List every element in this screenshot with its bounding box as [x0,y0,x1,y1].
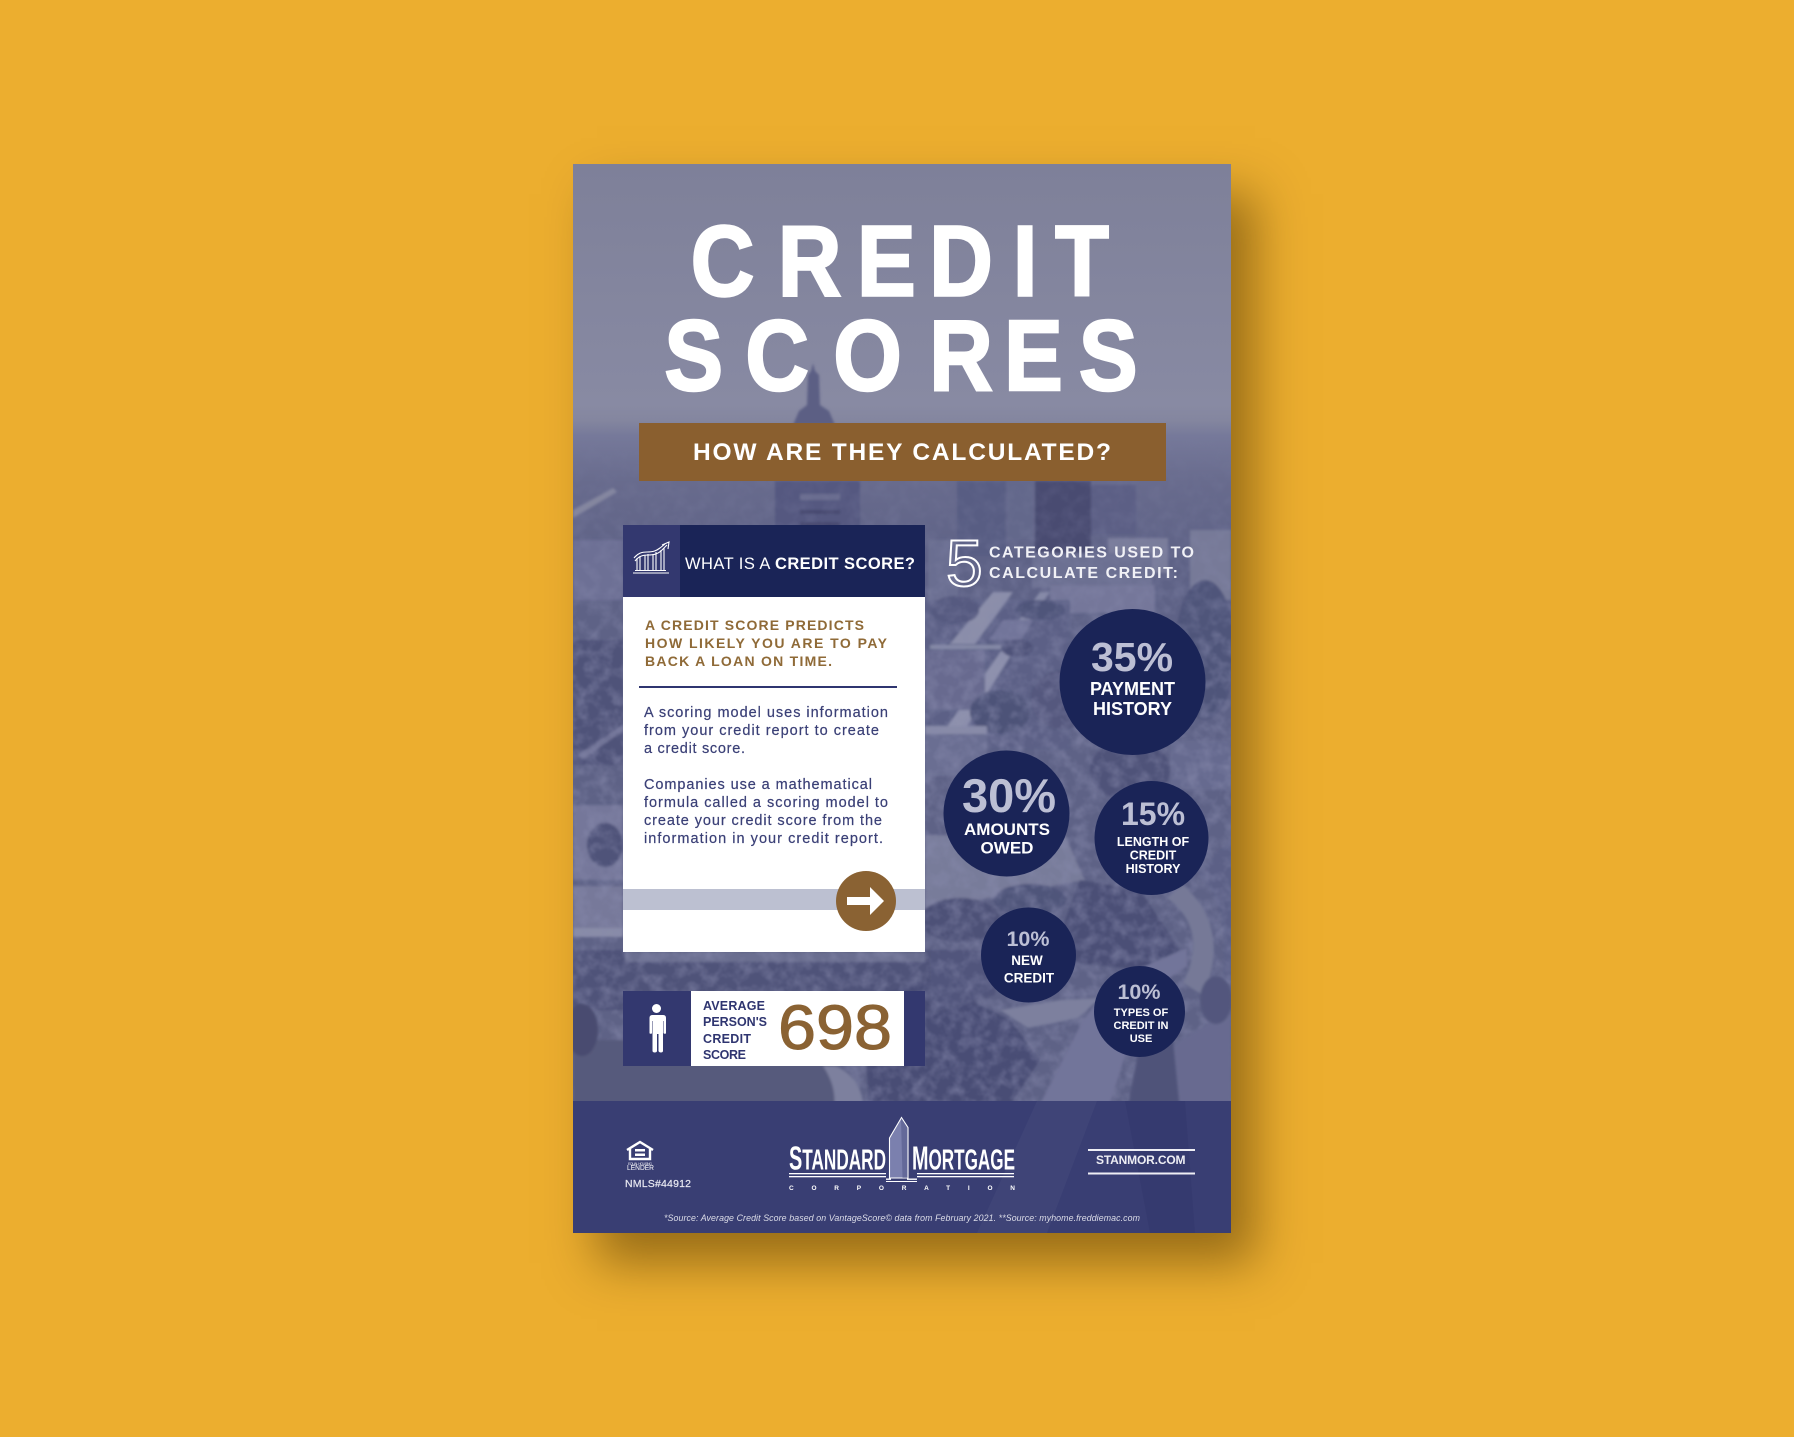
title: credit scores: SCORES [664,300,1138,411]
callout: credit score prediction: HOW LIKELY YOU ARE TO PAY [645,635,888,651]
heading: 5 categories: 5 [946,526,983,600]
circle: 15% length of credit history: LENGTH OF [1117,835,1189,849]
circle: 15% length of credit history: CREDIT [1130,848,1177,862]
skyline [957,481,1006,544]
circle: 30% amounts owed [944,750,1070,876]
circle: 10% types of credit in use: TYPES OF [1114,1007,1168,1019]
label: average person's credit score: CREDIT [703,1032,751,1046]
text: mathematical formula: formula called a scoring model to [644,795,888,811]
road [1037,948,1187,1110]
circle: 10% new credit: NEW [1011,953,1043,968]
label: average person's credit score: AVERAGE [703,999,765,1013]
panel: what is a credit score [623,525,925,952]
shore trees [860,980,1040,1120]
plaza and boulevard [925,600,1070,750]
footnote: sources: *Source: Average Credit Score based on VantageScore© data from February 2021. **Source: myhome.freddiemac.com [664,1213,1140,1223]
average credit score box [623,991,925,1066]
circle: 10% types of credit in use: USE [1130,1033,1152,1045]
banner: how are they calculated: HOW ARE THEY CALCULATED? [693,439,1111,466]
left strip [573,640,623,765]
circle: 15% length of credit history [1094,781,1208,895]
circle: 35% payment history [1060,609,1206,755]
card header: WHAT IS A CREDIT SCORE? [685,555,915,573]
callout: credit score prediction [645,617,888,669]
link: stanmor.com: STANMOR.COM [1096,1153,1186,1167]
circle: 15% length of credit history: 15% [1121,796,1185,832]
callout: credit score prediction: BACK A LOAN ON TIME. [645,653,832,669]
poster background: aerial city photo [566,164,1235,1120]
circle: 30% amounts owed: AMOUNTS [964,820,1050,839]
text: scoring model [644,705,888,757]
number: 698: 698 [778,993,892,1063]
circle: 10% new credit [981,908,1076,1002]
callout: credit score prediction: A CREDIT SCORE PREDICTS [645,617,864,633]
parking [925,835,1085,910]
heading: 5 categories: CATEGORIES USED TO [989,544,1194,562]
icon: rising bar chart [633,542,669,573]
footer band [573,1101,1231,1233]
heading: 5 categories [946,526,1194,600]
circle: 10% new credit: 10% [1006,927,1050,951]
trees below card [573,950,943,1010]
icon: equal housing lender: EQUAL HOUSING [628,1162,652,1166]
card header [623,525,925,597]
text: nmls number: NMLS#44912 [625,1178,691,1190]
circle: 15% length of credit history: HISTORY [1126,862,1181,876]
logo: standard mortgage corporation [789,1118,1015,1192]
label: average person's credit score: SCORE [703,1048,746,1062]
logo: standard mortgage corporation: STANDARD [789,1140,886,1176]
text: scoring model: a credit score. [644,741,745,757]
icon: equal housing lender [627,1142,654,1172]
right side trees [1178,579,1231,720]
text: mathematical formula: create your credit score from the [644,813,882,829]
text: mathematical formula [644,777,888,847]
title: credit scores: CREDIT [691,205,1109,317]
logo: standard mortgage corporation: CORPORATION [789,1185,1015,1192]
icon: person [650,1004,666,1052]
circle: 35% payment history: HISTORY [1093,699,1172,719]
icon: equal housing lender: LENDER [627,1165,654,1172]
circle: 10% types of credit in use: CREDIT IN [1114,1020,1169,1032]
text: mathematical formula: information in your credit report. [644,831,883,847]
text: mathematical formula: Companies use a mathematical [644,777,872,793]
text: scoring model: A scoring model uses information [644,705,888,721]
link: stanmor.com [1088,1149,1195,1174]
tower [793,363,835,425]
circle: 30% amounts owed: OWED [981,838,1033,858]
water [573,1040,834,1101]
circle: 30% amounts owed: 30% [962,769,1056,822]
heading: 5 categories: CALCULATE CREDIT: [989,565,1178,582]
circle: 10% new credit: CREDIT [1004,970,1055,986]
logo: standard mortgage corporation: MORTGAGE [912,1140,1015,1176]
label: average person's credit score [703,999,767,1062]
circle: 35% payment history: 35% [1091,634,1173,680]
circle: 10% types of credit in use [1094,966,1185,1057]
icon: arrow button [836,871,896,931]
banner: how are they calculated [639,423,1166,481]
circle: 35% payment history: PAYMENT [1090,679,1175,699]
title: credit scores [664,205,1138,411]
curved road [1167,885,1214,995]
circle: 10% types of credit in use: 10% [1117,980,1161,1004]
label: average person's credit score: PERSON'S [703,1015,767,1029]
text: scoring model: from your credit report to create [644,723,879,739]
